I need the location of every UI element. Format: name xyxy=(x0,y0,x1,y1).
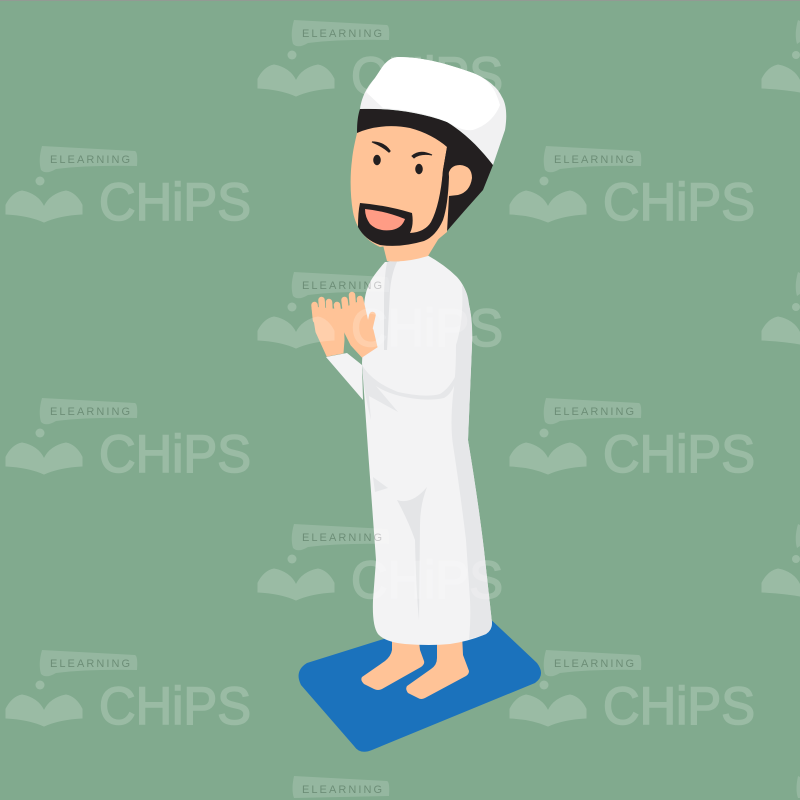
beard xyxy=(358,147,449,246)
sleeve crease xyxy=(362,365,457,420)
watermark logo: ELEARNING xyxy=(554,406,634,418)
knee fold xyxy=(397,487,427,620)
face xyxy=(351,126,447,247)
neck xyxy=(383,225,447,261)
watermark logo xyxy=(510,146,755,232)
watermark logo: CHiPS xyxy=(99,173,251,232)
watermark logo: ELEARNING xyxy=(50,406,130,418)
watermark logo xyxy=(292,776,389,798)
mouth xyxy=(365,209,405,230)
watermark logo xyxy=(6,398,251,484)
robe xyxy=(362,255,492,645)
watermark logo xyxy=(6,146,251,232)
watermark logo: CHiPS xyxy=(99,425,251,484)
watermark logo xyxy=(258,20,503,106)
far sleeve xyxy=(326,353,363,400)
watermark logo: ELEARNING xyxy=(302,532,382,544)
watermark logo xyxy=(762,272,800,344)
watermark logo: CHiPS xyxy=(99,677,251,736)
watermark logo xyxy=(6,650,251,736)
watermark logo: CHiPS xyxy=(603,173,755,232)
watermark logo: ELEARNING xyxy=(302,28,382,40)
watermark logo: CHiPS xyxy=(351,47,503,106)
watermark logo: ELEARNING xyxy=(554,154,634,166)
watermark logo xyxy=(762,524,800,596)
man figure xyxy=(312,57,506,699)
watermark logo: CHiPS xyxy=(351,551,503,610)
watermark logo xyxy=(796,776,800,798)
placket xyxy=(384,258,399,350)
watermark logo: ELEARNING xyxy=(554,658,634,670)
ear xyxy=(430,165,472,246)
prayer mat xyxy=(299,610,541,752)
watermark logo: ELEARNING xyxy=(50,658,130,670)
hair xyxy=(357,109,493,231)
eyes xyxy=(372,142,432,174)
watermark logo: ELEARNING xyxy=(50,154,130,166)
cap xyxy=(360,57,506,165)
watermark logo xyxy=(510,650,755,736)
robe shading xyxy=(452,285,492,639)
watermark logo xyxy=(762,20,800,92)
praying hands xyxy=(312,295,377,357)
watermark logo: CHiPS xyxy=(603,425,755,484)
watermark logo: ELEARNING xyxy=(302,784,382,796)
watermark logo xyxy=(510,398,755,484)
watermark logo: ELEARNING xyxy=(302,280,382,292)
watermark logo: CHiPS xyxy=(603,677,755,736)
watermark logo xyxy=(258,524,503,610)
cap highlight xyxy=(366,57,500,130)
head xyxy=(351,57,506,247)
watermark logo: CHiPS xyxy=(351,299,503,358)
watermark logo xyxy=(258,272,503,358)
feet xyxy=(361,632,469,699)
